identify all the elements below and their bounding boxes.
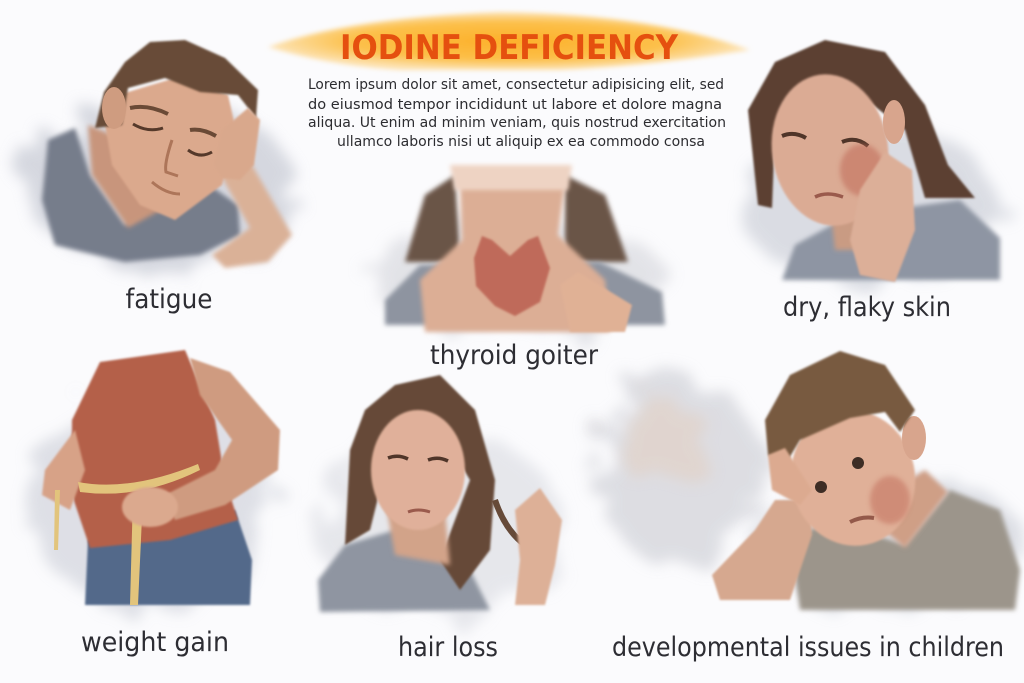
panel: hair loss: [315, 375, 565, 615]
neck and chest: [420, 185, 610, 332]
shirt: [72, 350, 238, 548]
eyes: [815, 481, 827, 493]
neck top fade: [450, 165, 572, 190]
jeans: [85, 510, 252, 605]
arm: [712, 500, 812, 600]
ear: [883, 100, 905, 144]
label: fatigue: fatigue: [126, 284, 212, 315]
arm: [212, 165, 292, 268]
intro text block: aliqua. Ut enim ad minim veniam, quis nostrud exercitation: [308, 115, 726, 131]
mouth: [815, 194, 843, 197]
mouth: [408, 510, 430, 512]
hair: [765, 351, 915, 465]
hand: [214, 108, 260, 180]
hair: [95, 40, 258, 128]
face: [371, 410, 465, 530]
closed eyes: [133, 124, 212, 155]
hand: [122, 487, 178, 527]
face: [778, 399, 928, 557]
label: hair loss: hair loss: [398, 632, 498, 663]
panel: developmental issues: [595, 351, 1020, 610]
watercolor wash: [595, 375, 765, 565]
shoulders: [385, 262, 665, 325]
label: weight gain: weight gain: [81, 627, 229, 658]
hair strand: [495, 500, 525, 545]
face: [105, 78, 236, 220]
red patch: [870, 476, 910, 524]
hand: [560, 272, 632, 332]
shirt: [42, 128, 240, 262]
hair: [748, 40, 975, 208]
neck: [385, 500, 450, 565]
title banner: [268, 12, 750, 70]
watercolor wash: [315, 435, 565, 615]
eyes: [782, 134, 868, 146]
shirt: [318, 530, 490, 612]
intro text block: Lorem ipsum dolor sit amet, consectetur adipisicing elit, sed: [308, 77, 724, 93]
watercolor wash: [25, 390, 275, 610]
hair: [345, 375, 495, 590]
panel: dry, flaky skin: [740, 40, 1000, 285]
hair: [405, 175, 628, 262]
label: thyroid goiter: thyroid goiter: [430, 340, 599, 371]
nose and mouth: [152, 140, 180, 194]
intro text block: do eiusmod tempor incididunt ut labore et dolore magna: [308, 97, 722, 113]
hand and arm: [515, 488, 562, 605]
thyroid: [474, 236, 550, 316]
arm right: [165, 358, 280, 520]
shirt: [782, 200, 1000, 280]
ear: [102, 87, 126, 129]
intro text block: [308, 77, 726, 150]
face: [762, 67, 898, 233]
ear: [902, 416, 926, 460]
mouth: [850, 518, 874, 522]
neck: [860, 470, 948, 548]
arm left: [42, 430, 85, 510]
tape measure: [54, 464, 200, 605]
label: dry, flaky skin: dry, flaky skin: [783, 292, 951, 323]
panel: weight gain: [25, 350, 280, 610]
watercolor wash: [740, 125, 1000, 285]
neck: [830, 180, 890, 250]
shirt: [790, 490, 1020, 610]
eyes: [388, 456, 448, 461]
watercolor wash: [25, 100, 295, 270]
neck: [88, 125, 170, 228]
panel: fatigue: [25, 40, 295, 270]
red patch: [840, 144, 884, 196]
watercolor wash right: [760, 470, 1020, 610]
hand: [768, 448, 812, 505]
eyebrows: [130, 107, 216, 136]
watercolor wash: [365, 220, 665, 330]
warm wash: [610, 400, 710, 480]
intro text block: ullamco laboris nisi ut aliquip ex ea commodo consa: [337, 134, 705, 150]
title: IODINE DEFICIENCY: [340, 28, 678, 68]
hand: [850, 152, 915, 282]
panel: thyroid goiter: [365, 165, 665, 332]
